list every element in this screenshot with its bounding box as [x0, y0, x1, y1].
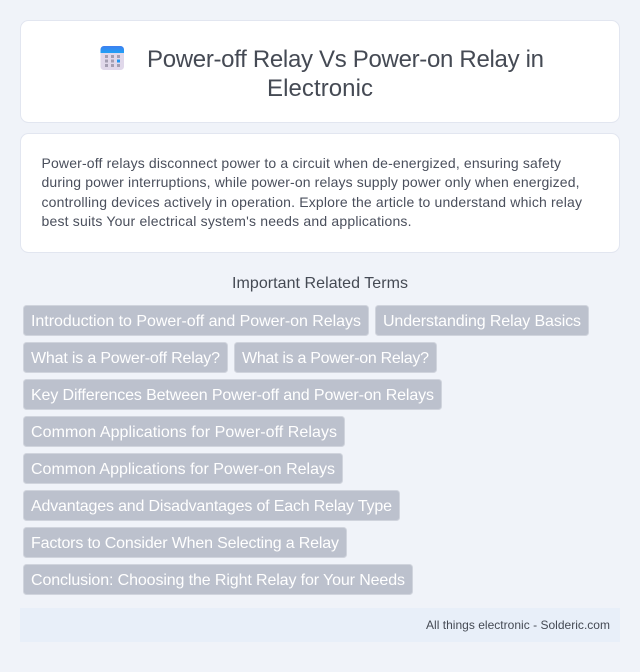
- icon: calendar: [100, 46, 124, 70]
- tag: introduction: Introduction to Power-off and Power-on Relays: [31, 313, 361, 330]
- summary text: during power interruptions, while power-on relays supply power only when energized,: [42, 174, 580, 190]
- tag: power-on applications: [24, 454, 342, 484]
- tag: key differences: [24, 380, 442, 410]
- footer: [20, 608, 620, 642]
- summary text: Power-off relays disconnect power to a circuit when de-energized, ensuring safety: [42, 155, 561, 171]
- panel: title card: [20, 20, 620, 122]
- tag: power-on relay: [234, 342, 436, 372]
- tag: selection factors: Factors to Consider When Selecting a Relay: [31, 535, 339, 552]
- title: Power-off Relay Vs Power-on Relay in: [147, 46, 544, 73]
- tag: selection factors: [24, 528, 346, 558]
- tag: advantages: [24, 490, 400, 520]
- tag: power-on applications: Common Applications for Power-on Relays: [31, 461, 335, 478]
- summary text: best suits Your electrical system's needs and applications.: [42, 213, 412, 229]
- heading: important related terms: Important Related Terms: [232, 275, 408, 292]
- tag: key differences: Key Differences Between Power-off and Power-on Relays: [31, 387, 434, 404]
- summary text: [42, 155, 582, 229]
- tag: power-on relay: What is a Power-on Relay?: [242, 350, 429, 367]
- title: Electronic: [267, 75, 373, 102]
- tag: relay basics: [376, 306, 588, 336]
- tag: conclusion: Conclusion: Choosing the Right Relay for Your Needs: [31, 572, 405, 589]
- tag: power-off applications: [24, 416, 344, 446]
- title: [147, 46, 544, 102]
- tag: power-off applications: Common Applications for Power-off Relays: [31, 424, 337, 441]
- footer: All things electronic - Solderic.com: [426, 618, 610, 632]
- tag: introduction: [24, 306, 368, 336]
- tag: conclusion: [24, 564, 412, 594]
- tag: power-off relay: What is a Power-off Relay?: [31, 350, 220, 367]
- tag: advantages: Advantages and Disadvantages of Each Relay Type: [31, 498, 392, 515]
- panel: summary: [20, 134, 620, 252]
- summary text: controlling devices actively in operation. Explore the article to understand which relay: [42, 194, 582, 210]
- tag list: [24, 306, 588, 594]
- tag: power-off relay: [24, 342, 228, 372]
- tag: relay basics: Understanding Relay Basics: [383, 313, 581, 330]
